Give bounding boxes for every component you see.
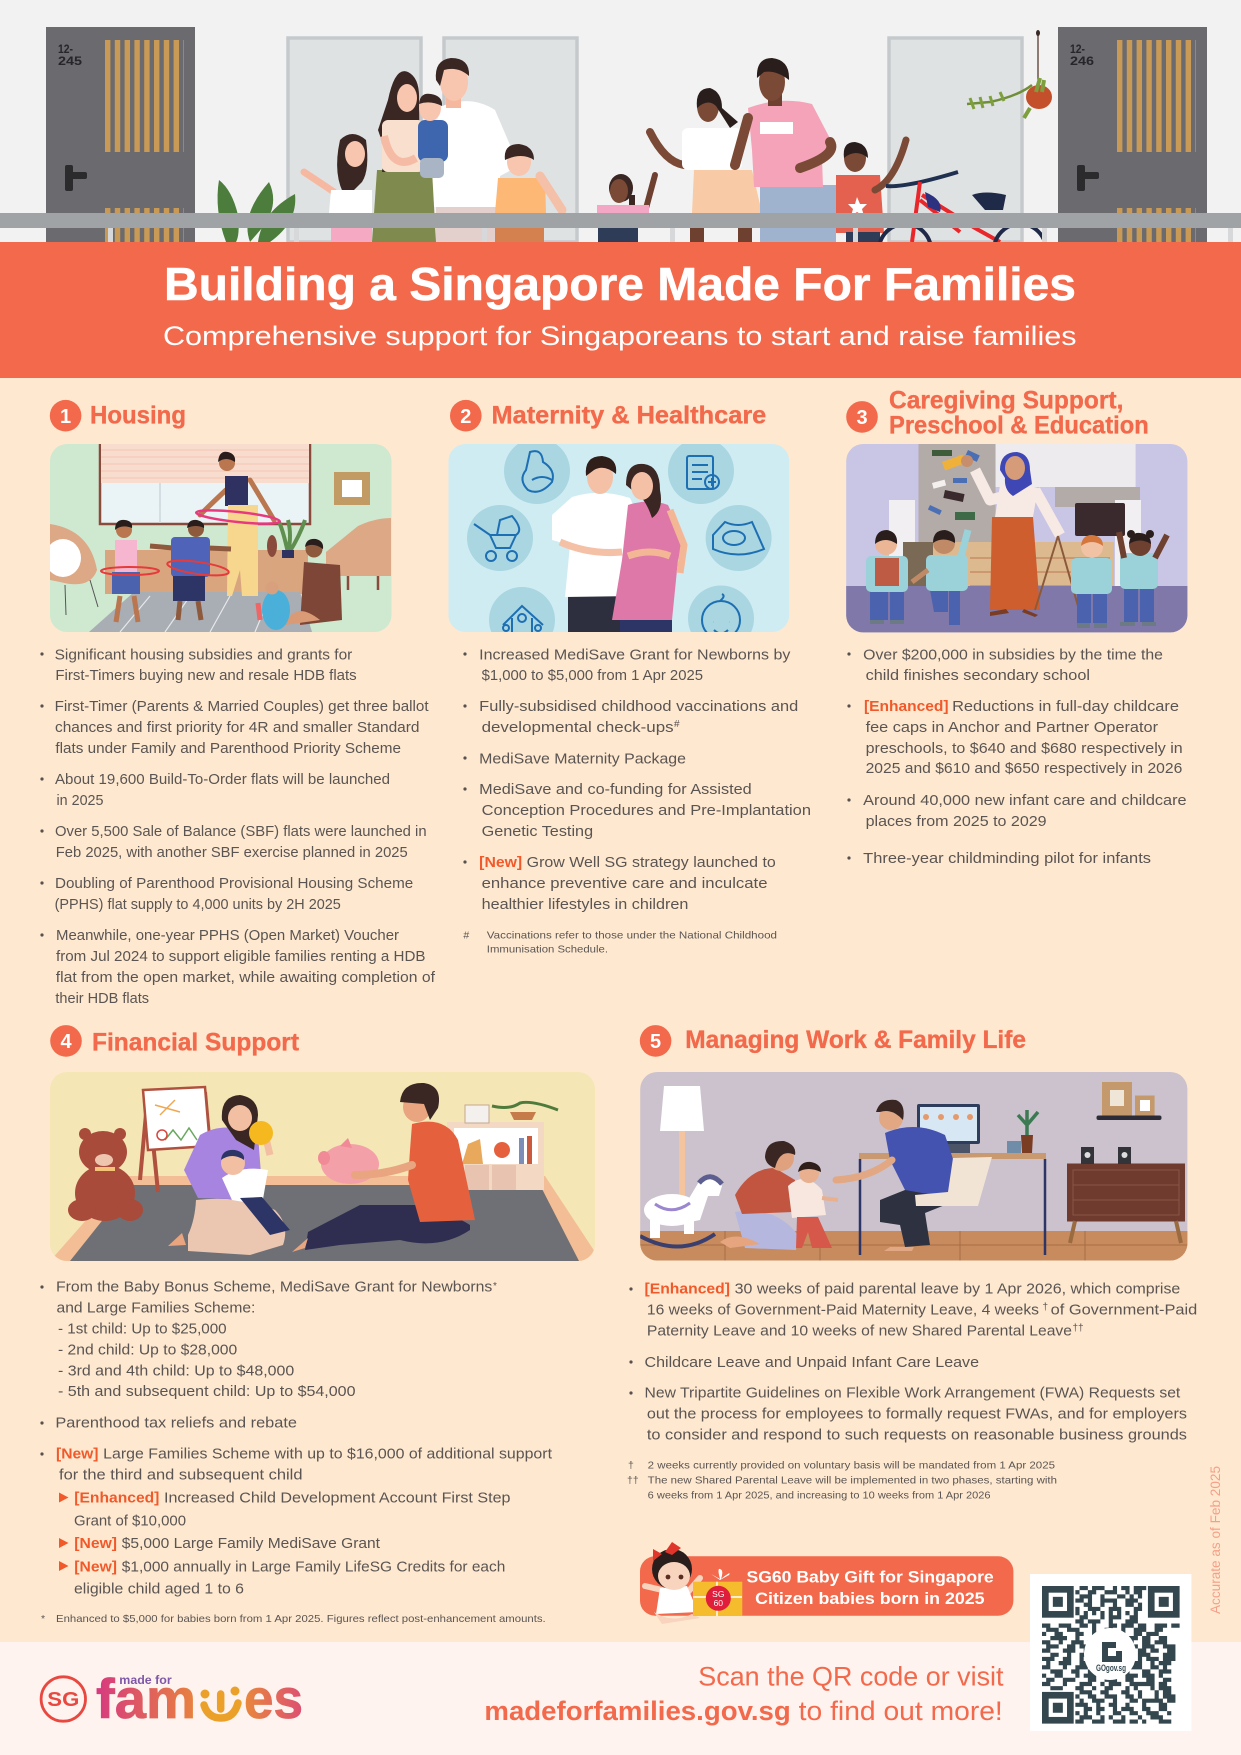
text: caregiving bullets: Around 40,000 new infant care and childcare bbox=[863, 792, 1187, 809]
heading: caregiving: 3 bbox=[856, 407, 868, 429]
neighbouring doors bbox=[288, 38, 1022, 242]
heading: housing bbox=[50, 400, 186, 432]
vertical note: accurate as of date: Accurate as of Feb 2025 bbox=[1208, 1466, 1223, 1614]
text: work and family bullets: † bbox=[1042, 1302, 1048, 1313]
text: housing bullets: their HDB flats bbox=[55, 990, 149, 1007]
panel: housing bbox=[40, 400, 436, 1007]
door: unit 12-245: 245 bbox=[58, 54, 82, 68]
subtitle: Comprehensive support for Singaporeans to start and raise families bbox=[163, 321, 1076, 351]
text: financial bullets: and Large Families Scheme: bbox=[56, 1300, 255, 1317]
header illustration: corridor with two families bbox=[0, 0, 1241, 242]
text: housing bullets: Meanwhile, one-year PPHS (Open Market) Voucher bbox=[56, 927, 399, 944]
text: caregiving bullets: fee caps in Anchor and Partner Operator bbox=[866, 719, 1158, 736]
footnotes: leave: †† bbox=[627, 1475, 639, 1487]
desk and computer bbox=[859, 1104, 1046, 1255]
logo: SG made for families: fam bbox=[96, 1667, 196, 1730]
text: call to action: Scan the QR code or visit bbox=[698, 1662, 1004, 1692]
text: work and family bullets: Childcare Leave and Unpaid Infant Care Leave bbox=[644, 1354, 979, 1371]
text: housing bullets: from Jul 2024 to support eligible families renting a HDB bbox=[56, 948, 425, 965]
text: housing bullets: in 2025 bbox=[56, 792, 104, 809]
father on video call bbox=[836, 1100, 955, 1251]
text: work and family bullets: Paternity Leave and 10 weeks of new Shared Parental Leave bbox=[647, 1322, 1072, 1339]
text: caregiving bullets: child finishes secondary school bbox=[866, 667, 1090, 684]
mother bbox=[196, 452, 280, 596]
boy bbox=[150, 520, 231, 620]
footer strip bbox=[0, 1642, 1241, 1755]
easel bbox=[140, 1087, 212, 1192]
girl bbox=[101, 520, 159, 622]
text: financial bullets: - 1st child: Up to $25,000 bbox=[58, 1320, 227, 1338]
text: maternity bullets: Genetic Testing bbox=[482, 823, 593, 840]
heading: financial support: 4 bbox=[60, 1031, 72, 1053]
text: housing bullets: Doubling of Parenthood Provisional Housing Scheme bbox=[55, 875, 413, 892]
text: work and family bullets: out the process for employees to formally request FWAs, and for employers bbox=[647, 1406, 1187, 1423]
sub-bullets: large families scheme: Increased Child Development Account First Step bbox=[164, 1490, 510, 1507]
icon: baby bbox=[645, 1542, 700, 1624]
text: maternity bullets: developmental check-ups bbox=[482, 719, 674, 736]
text: work and family bullets: 16 weeks of Government-Paid Maternity Leave, 4 weeks bbox=[647, 1302, 1039, 1318]
text: maternity bullets bbox=[463, 646, 811, 913]
chair bbox=[915, 1157, 992, 1206]
text: maternity bullets: Increased MediSave Grant for Newborns by bbox=[479, 646, 791, 663]
title: Building a Singapore Made For Families bbox=[164, 258, 1076, 310]
text: call to action: to find out more! bbox=[799, 1696, 1003, 1726]
logo: SG made for families bbox=[41, 1667, 303, 1730]
panel: caregiving support, preschool and education bbox=[846, 387, 1188, 867]
QR code bbox=[1030, 1574, 1191, 1731]
icons: mother, pram, family, checklist, ultrasound, baby bbox=[474, 451, 764, 639]
sub-bullets: large families scheme: $5,000 Large Family MediSave Grant bbox=[122, 1535, 381, 1552]
text: maternity bullets: enhance preventive care and inculcate bbox=[482, 875, 768, 892]
text: call to action: madeforfamilies.gov.sg bbox=[484, 1696, 791, 1726]
logo: SG made for families: es bbox=[244, 1667, 303, 1730]
sub-bullets: large families scheme: [Enhanced] bbox=[74, 1490, 159, 1507]
icon: hanging plant bbox=[967, 30, 1052, 118]
text: housing bullets: (PPHS) flat supply to 4,000 units by 2H 2025 bbox=[55, 896, 341, 913]
text: maternity bullets: Conception Procedures and Pre-Implantation bbox=[482, 802, 811, 819]
text: housing bullets: Significant housing subsidies and grants for bbox=[55, 646, 352, 663]
family two bbox=[597, 58, 906, 242]
heading: maternity and healthcare: 2 bbox=[460, 406, 471, 428]
footnote: vaccinations bbox=[463, 930, 777, 956]
text: caregiving bullets: 2025 and $610 and $650 respectively in 2026 bbox=[866, 760, 1182, 777]
footnotes: leave: 6 weeks from 1 Apr 2025, and increasing to 10 weeks from 1 Apr 2026 bbox=[648, 1489, 991, 1501]
text: caregiving bullets: Three-year childminding pilot for infants bbox=[863, 850, 1151, 867]
heading: caregiving: Caregiving Support, bbox=[889, 387, 1123, 415]
text: work and family bullets: [Enhanced] bbox=[644, 1281, 730, 1298]
text: caregiving bullets: preschools, to $640 and $680 respectively in bbox=[866, 740, 1183, 757]
text: maternity bullets: MediSave Maternity Package bbox=[479, 750, 686, 767]
text: financial bullets: - 3rd and 4th child: Up to $48,000 bbox=[58, 1362, 294, 1379]
panel: maternity and healthcare bbox=[448, 400, 811, 956]
text: work and family bullets: to consider and respond to such requests on reasonable business grounds bbox=[647, 1426, 1187, 1444]
sub-bullets: large families scheme: $1,000 annually in Large Family LifeSG Credits for each bbox=[122, 1558, 505, 1576]
expecting father bbox=[552, 456, 640, 634]
heading: caregiving: Preschool & Education bbox=[889, 412, 1149, 440]
QR code: GOgov.sg bbox=[1096, 1663, 1126, 1673]
text: housing bullets: About 19,600 Build-To-Order flats will be launched bbox=[55, 771, 390, 788]
icon: gift box bbox=[693, 1569, 742, 1616]
text: financial bullets: Parenthood tax reliefs and rebate bbox=[55, 1415, 297, 1432]
sub-bullets: large families scheme: [New] bbox=[74, 1535, 117, 1552]
heading: maternity and healthcare: Maternity & Healthcare bbox=[492, 402, 766, 430]
footnote: medisave grant: Enhanced to $5,000 for babies born from 1 Apr 2025. Figures reflect post-enhancement amounts. bbox=[56, 1613, 546, 1625]
heading: housing: Housing bbox=[90, 402, 186, 430]
door: unit 12-245: 12- bbox=[58, 42, 73, 56]
footnotes: leave: † bbox=[628, 1459, 634, 1471]
text: housing bullets: flat from the open market, while awaiting completion of bbox=[56, 969, 436, 986]
text: work and family bullets: New Tripartite Guidelines on Flexible Work Arrangement (FWA) Requests set bbox=[644, 1385, 1181, 1402]
footnotes: leave bbox=[627, 1459, 1057, 1501]
heading: financial support: Financial Support bbox=[92, 1028, 300, 1056]
text: caregiving bullets: places from 2025 to 2029 bbox=[866, 813, 1047, 830]
icon: potted plant bbox=[218, 180, 295, 242]
sub-bullets: large families scheme bbox=[59, 1490, 510, 1597]
heading: caregiving bbox=[846, 387, 1149, 440]
icon: piggy bank bbox=[318, 1138, 379, 1184]
text: financial bullets: [New] bbox=[56, 1446, 98, 1462]
text: caregiving bullets: Reductions in full-day childcare bbox=[952, 698, 1179, 715]
expecting mother bbox=[612, 464, 684, 635]
text: financial bullets: for the third and subsequent child bbox=[59, 1466, 302, 1483]
icon: teddy bear bbox=[68, 1128, 143, 1221]
text: financial bullets: From the Baby Bonus Scheme, MediSave Grant for Newborns bbox=[56, 1279, 492, 1296]
panel: managing work and family life bbox=[627, 1025, 1197, 1501]
text: housing bullets: Feb 2025, with another SBF exercise planned in 2025 bbox=[56, 844, 408, 861]
panel: financial support bbox=[40, 1025, 595, 1625]
text: housing bullets: Over 5,500 Sale of Balance (SBF) flats were launched in bbox=[55, 823, 427, 840]
text: financial bullets bbox=[40, 1279, 553, 1597]
balcony railing bbox=[0, 213, 1241, 242]
text: work and family bullets: 30 weeks of paid parental leave by 1 Apr 2026, which comprise bbox=[735, 1281, 1180, 1298]
lamp bbox=[660, 1086, 704, 1196]
text: financial bullets: Large Families Scheme with up to $16,000 of additional support bbox=[103, 1446, 553, 1462]
text: housing bullets: flats under Family and Parenthood Priority Scheme bbox=[55, 740, 401, 757]
logo: SG made for families: made for bbox=[119, 1675, 172, 1687]
text: work and family bullets: †† bbox=[1072, 1323, 1084, 1334]
icon: bicycle bbox=[878, 170, 1042, 242]
heading: work and family: 5 bbox=[650, 1031, 661, 1053]
icon: gift box: SG bbox=[712, 1589, 724, 1599]
title banner bbox=[0, 242, 1241, 378]
mother and baby bbox=[168, 1095, 290, 1255]
footnote: vaccinations: Vaccinations refer to those under the National Childhood bbox=[487, 930, 777, 942]
sub-bullets: large families scheme: Grant of $10,000 bbox=[74, 1512, 186, 1529]
text: work and family bullets bbox=[629, 1281, 1197, 1444]
text: maternity bullets: [New] bbox=[479, 854, 522, 871]
text: housing bullets bbox=[40, 646, 436, 1007]
text: housing bullets: chances and first priority for 4R and smaller Standard bbox=[55, 719, 419, 736]
mother and toddler bbox=[720, 1141, 838, 1250]
callout: SG60 baby gift: Citizen babies born in 2025 bbox=[755, 1589, 985, 1608]
text: financial bullets: - 2nd child: Up to $28,000 bbox=[58, 1341, 237, 1358]
text: maternity bullets: # bbox=[674, 719, 680, 730]
heading: work and family: Managing Work & Family Life bbox=[685, 1026, 1026, 1054]
text: caregiving bullets bbox=[847, 646, 1187, 867]
shelf bbox=[447, 1102, 558, 1190]
text: housing bullets: First-Timers buying new and resale HDB flats bbox=[55, 667, 357, 684]
text: maternity bullets: Grow Well SG strategy launched to bbox=[527, 854, 776, 871]
footnotes: leave: 2 weeks currently provided on voluntary basis will be mandated from 1 Apr 2025 bbox=[648, 1459, 1055, 1471]
text: maternity bullets: healthier lifestyles in children bbox=[482, 896, 688, 913]
illustration: parents with piggy bank bbox=[50, 1072, 595, 1261]
footnote: vaccinations: Immunisation Schedule. bbox=[487, 944, 608, 956]
heading: housing: 1 bbox=[60, 406, 71, 428]
text: call to action bbox=[484, 1662, 1004, 1726]
footnote: vaccinations: # bbox=[463, 930, 469, 942]
father bbox=[292, 1083, 475, 1252]
text: caregiving bullets: Over $200,000 in subsidies by the time the bbox=[863, 646, 1163, 663]
illustration: preschool teacher and children bbox=[846, 444, 1188, 633]
callout: SG60 baby gift: SG60 Baby Gift for Singapore bbox=[746, 1568, 994, 1586]
text: work and family bullets: of Government-Paid bbox=[1051, 1302, 1197, 1318]
text: housing bullets: First-Timer (Parents & Married Couples) get three ballot bbox=[55, 698, 429, 715]
door: unit 12-246 bbox=[1058, 27, 1207, 242]
door: unit 12-246: 246 bbox=[1070, 54, 1094, 68]
callout: SG60 baby gift bbox=[640, 1542, 1013, 1624]
text: maternity bullets: MediSave and co-funding for Assisted bbox=[479, 781, 752, 798]
footnotes: leave: The new Shared Parental Leave will be implemented in two phases, starting with bbox=[648, 1475, 1057, 1487]
illustration: parents working from home bbox=[640, 1072, 1188, 1261]
text: maternity bullets: $1,000 to $5,000 from 1 Apr 2025 bbox=[482, 667, 703, 684]
flying coloured blocks bbox=[928, 450, 980, 520]
door: unit 12-245 bbox=[46, 27, 195, 242]
sub-bullets: large families scheme: eligible child aged 1 to 6 bbox=[74, 1580, 244, 1597]
text: caregiving bullets: [Enhanced] bbox=[864, 698, 949, 715]
family one bbox=[304, 58, 562, 242]
icon: gift box: 60 bbox=[714, 1598, 723, 1608]
children bbox=[866, 530, 1167, 628]
illustration: expecting couple with health icons bbox=[448, 444, 790, 632]
door: unit 12-246: 12- bbox=[1070, 42, 1085, 56]
sideboard and speakers bbox=[1067, 1082, 1185, 1243]
sub-bullets: large families scheme: [New] bbox=[74, 1558, 117, 1576]
father and baby bbox=[258, 539, 342, 630]
rocking horse bbox=[640, 1177, 722, 1247]
text: financial bullets: * bbox=[493, 1281, 497, 1292]
footnote: medisave grant: * bbox=[41, 1613, 45, 1625]
text: financial bullets: - 5th and subsequent child: Up to $54,000 bbox=[58, 1383, 356, 1400]
teacher bbox=[961, 452, 1060, 617]
illustration: family hula hooping at home bbox=[45, 444, 392, 632]
text: maternity bullets: Fully-subsidised childhood vaccinations and bbox=[479, 698, 798, 715]
logo: SG made for families: SG bbox=[47, 1689, 79, 1711]
icon circles bbox=[467, 444, 772, 632]
